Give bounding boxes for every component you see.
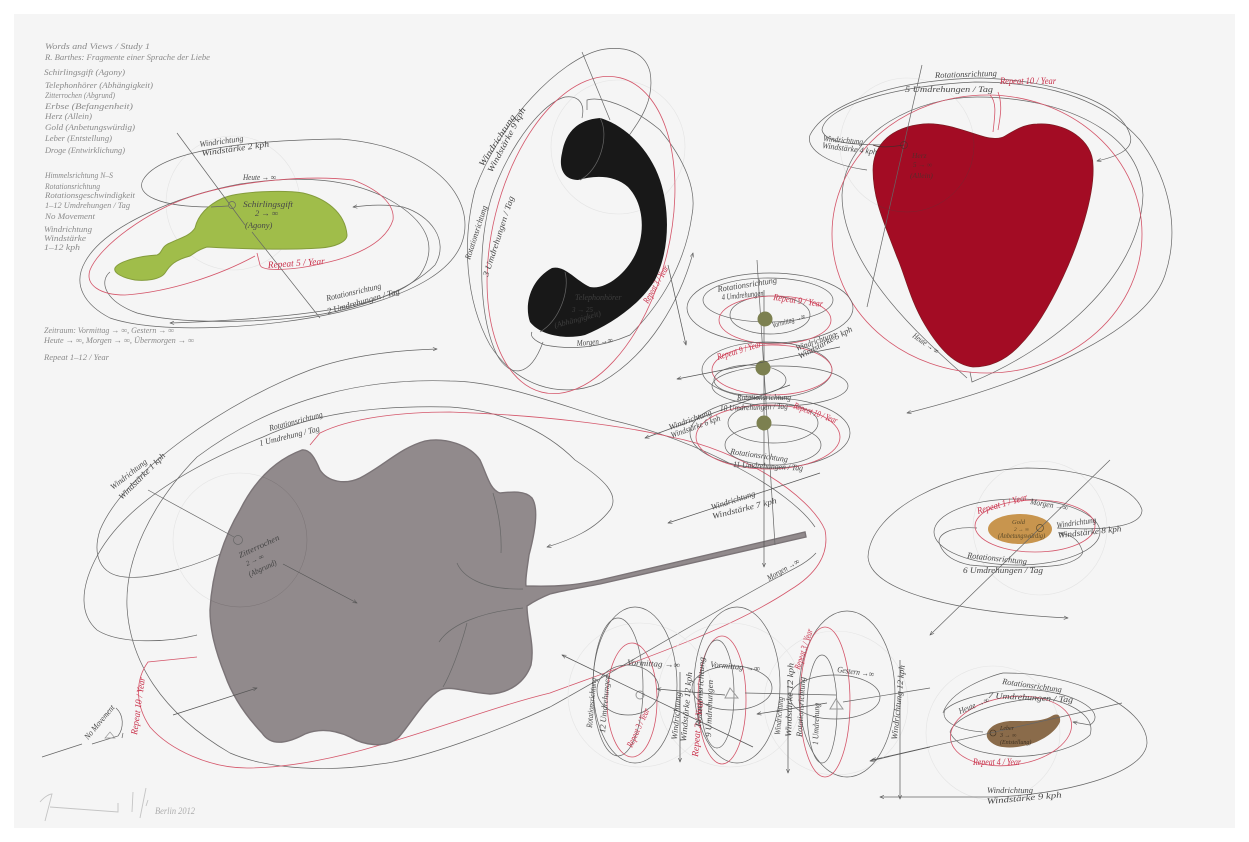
panel: three vertical discs: Vormittag →∞: [710, 659, 761, 673]
panel: brown liver shape with orbits: Rotationsrichtung: [1001, 676, 1063, 694]
panel: three vertical discs: Gestern →∞: [837, 664, 875, 679]
panel: green hemlock shape with orbits: 2 → ∞: [255, 208, 278, 218]
panel: brown liver shape with orbits: Leber: [999, 726, 1015, 732]
panel: three olive peas with orbits: Repeat 9 / Year: [715, 340, 763, 363]
text block: title and legend: Heute → ∞, Morgen → ∞, Übermorgen → ∞: [43, 335, 194, 345]
panel: three vertical discs: 1 Umdrehung: [810, 703, 821, 745]
panel: three olive peas with orbits: Rotationsrichtung: [736, 392, 791, 402]
panel: brown liver shape with orbits: Heute →∞: [956, 695, 990, 716]
panel: three vertical discs: Repeat 3 / Year: [793, 628, 816, 672]
icon: telephone receiver: [528, 118, 667, 337]
panel: grey electric ray shape: Rotationsrichtung: [267, 409, 324, 433]
panel: three olive peas with orbits: Windstärke 7 kph: [711, 495, 778, 521]
panel: grey electric ray shape: Windstärke 1 kph: [116, 451, 167, 501]
panel: no movement note: [81, 676, 148, 744]
panel: three olive peas with orbits: Rotationsrichtung: [729, 446, 789, 464]
text block: title and legend: Herz (Allein): [44, 111, 92, 121]
text block: title and legend: R. Barthes: Fragmente einer Sprache der Liebe: [44, 52, 210, 62]
text block: title and legend: Himmelsrichtung N–S: [44, 170, 114, 180]
text block: title and legend: Repeat 1–12 / Year: [43, 352, 110, 362]
icon: triangle marker middle: [725, 688, 738, 698]
panel: green hemlock shape with orbits: Heute → ∞: [242, 172, 276, 182]
panel: orange gold shape with orbits: Gold: [1012, 519, 1026, 526]
panel: red heart with orbits: 5 Umdrehungen / Tag: [905, 84, 993, 94]
panel: green hemlock shape with orbits: Rotationsrichtung: [324, 281, 382, 303]
icon: triangle marker right: [830, 699, 843, 709]
icon: gold shape: [988, 514, 1052, 544]
panel: orange gold shape with orbits: Morgen →∞: [1029, 496, 1069, 513]
panel: red heart with orbits: (Allein): [910, 171, 933, 180]
icon: gold circle marker: [636, 691, 644, 699]
panel: no movement note: Repeat 10 / Year: [130, 676, 148, 736]
icon: ray: [210, 440, 806, 745]
panel: orange gold shape with orbits: 2 → ∞: [1014, 527, 1029, 533]
panel: three olive peas with orbits: Repeat 10 / Year: [791, 401, 839, 427]
panel: green hemlock shape with orbits: [80, 133, 465, 328]
panel: brown liver shape with orbits: (Entstellung): [1000, 739, 1031, 746]
panel: black telephone receiver with orbits: [456, 48, 706, 413]
signature: [40, 788, 195, 821]
panel: green hemlock shape with orbits: Windrichtung: [199, 133, 244, 149]
signature: Berlin 2012: [155, 806, 195, 816]
panel: three olive peas with orbits: Windrichtung: [667, 407, 713, 432]
panel: three vertical discs: Repeat 2 / Year: [691, 698, 706, 758]
panel: three olive peas with orbits: Rotationsrichtung: [716, 275, 778, 294]
text block: title and legend: Windstärke: [44, 233, 86, 243]
panel: three olive peas with orbits: Repeat 9 / Year: [772, 293, 824, 310]
panel: brown liver shape with orbits: Repeat 4 / Year: [972, 758, 1021, 768]
panel: three olive peas with orbits: Windstärke 6 kph: [669, 413, 722, 440]
panel: three vertical discs: Windstärke 12 kph: [678, 672, 694, 742]
panel: black telephone receiver with orbits: 3 → 25: [571, 306, 594, 314]
panel: grey electric ray shape: (Abgrund): [247, 558, 278, 579]
panel: orange gold shape with orbits: Windstärke 8 kph: [1057, 523, 1122, 540]
panel: orange gold shape with orbits: Repeat 1 / Year: [975, 493, 1029, 517]
panel: brown liver shape with orbits: 7 Umdrehungen / Tag: [988, 690, 1073, 704]
panel: red heart with orbits: Rotationsrichtung: [934, 68, 997, 80]
panel: three vertical discs: Repeat 3 / Year: [625, 707, 653, 750]
panel: three vertical discs: Vormittag →∞: [627, 657, 680, 670]
panel: brown liver shape with orbits: Windrichtung: [987, 785, 1033, 795]
text block: title and legend: Leber (Entstellung): [44, 133, 112, 143]
panel: red heart with orbits: Heute → ∞: [910, 330, 941, 356]
text block: title and legend: Telephonhörer (Abhängigkeit): [45, 80, 153, 90]
panel: grey electric ray shape: Zitterrochen: [237, 533, 281, 560]
panel: black telephone receiver with orbits: Morgen →∞: [575, 335, 613, 348]
panel: three olive peas with orbits: [645, 260, 854, 583]
panel: red heart with orbits: Windrichtung: [823, 133, 864, 146]
icon: liver shape: [987, 714, 1060, 747]
panel: three vertical discs: Windrichtung: [772, 696, 785, 735]
panel: grey electric ray shape: Windrichtung: [108, 457, 149, 492]
text block: title and legend: Rotationsrichtung: [44, 181, 100, 191]
panel: green hemlock shape with orbits: 2 Umdrehungen / Tag: [326, 286, 401, 316]
icon: olive pea bottom: [756, 416, 772, 430]
panel: brown liver shape with orbits: Windstärke 9 kph: [986, 789, 1062, 806]
panel: orange gold shape with orbits: [868, 460, 1142, 635]
panel: three olive peas with orbits: 4 Umdrehungen: [721, 288, 764, 302]
panel: grey electric ray shape: 1 Umdrehung / Tag: [258, 423, 321, 448]
panel: black telephone receiver with orbits: (Abhängigkeit): [553, 309, 602, 330]
text block: title and legend: Zitterrochen (Abgrund): [45, 90, 115, 100]
text block: title and legend: Erbse (Befangenheit): [44, 101, 133, 111]
panel: black telephone receiver with orbits: 3 Umdrehungen / Tag: [480, 195, 516, 279]
panel: three vertical discs: Windrichtung 12 kph: [889, 665, 907, 740]
panel: three olive peas with orbits: 11 Umdrehungen / Tag: [733, 459, 803, 473]
text block: title and legend: Rotationsgeschwindigkeit: [44, 190, 136, 200]
panel: three vertical discs: 12 Umdrehungen: [597, 675, 612, 733]
panel: red heart with orbits: Herz: [911, 151, 927, 160]
panel: green hemlock shape with orbits: Windstärke 2 kph: [201, 139, 270, 158]
panel: orange gold shape with orbits: Rotationsrichtung: [966, 550, 1028, 566]
panel: black telephone receiver with orbits: Windstärke 9 kph: [485, 106, 528, 174]
icon: green shape: [115, 191, 347, 280]
text block: title and legend: Gold (Anbetungswürdig): [45, 122, 135, 132]
panel: black telephone receiver with orbits: Repeat 3 / Year: [642, 264, 672, 306]
panel: brown liver shape with orbits: 3 → ∞: [999, 733, 1017, 739]
text block: title and legend: 1–12 Umdrehungen / Tag: [45, 200, 130, 210]
panel: three olive peas with orbits: Vormittag →∞: [771, 311, 806, 330]
panel: three vertical discs: Windstärke 12 kph: [783, 663, 796, 737]
panel: brown liver shape with orbits: [872, 666, 1147, 806]
panel: black telephone receiver with orbits: Telephonhörer: [575, 293, 622, 302]
panel: grey electric ray shape: 2 → ∞: [244, 553, 265, 568]
panel: three olive peas with orbits: Morgen →∞: [764, 556, 801, 583]
text block: title and legend: No Movement: [44, 211, 96, 221]
panel: three vertical discs: 9 Umdrehungen: [703, 680, 715, 737]
panel: large orbits around ray: [84, 349, 826, 769]
panel: red heart with orbits: Repeat 10 / Year: [999, 77, 1056, 87]
panel: red heart with orbits: 5 → ∞: [913, 161, 932, 169]
text block: title and legend: Droge (Entwirklichung): [44, 145, 125, 155]
panel: green hemlock shape with orbits: Schirlingsgift: [243, 199, 294, 209]
panel: red heart with orbits: [809, 65, 1172, 413]
icon: olive pea top: [758, 312, 772, 326]
text block: title and legend: Zeitraum: Vormittag → ∞, Gestern → ∞: [44, 325, 174, 335]
panel: red heart with orbits: Windstärke 4 kph: [822, 140, 878, 157]
panel: three vertical discs: Rotationsrichtung: [693, 657, 707, 728]
panel: orange gold shape with orbits: Windrichtung: [1056, 515, 1097, 530]
icon: olive pea middle: [756, 360, 770, 376]
panel: green hemlock shape with orbits: (Agony): [245, 220, 273, 230]
text block: title and legend: Schirlingsgift (Agony): [44, 67, 125, 77]
panel: orange gold shape with orbits: 6 Umdrehungen / Tag: [963, 565, 1043, 575]
panel: three vertical discs: Rotationsrichtung: [794, 677, 807, 738]
icon: heart: [873, 124, 1093, 367]
panel: black telephone receiver with orbits: Rotationsrichtung: [462, 204, 489, 261]
panel: three vertical discs: Windrichtung: [669, 691, 683, 740]
panel: three olive peas with orbits: Windstärke 5 kph: [796, 324, 854, 361]
panel: orange gold shape with orbits: (Anbetungswürdig): [998, 532, 1046, 540]
text block: title and legend: Windrichtung: [44, 224, 92, 234]
text block: title and legend: 1–12 kph: [44, 242, 80, 252]
panel: three olive peas with orbits: Windrichtung: [710, 488, 756, 512]
text block: title and legend: [43, 41, 210, 362]
panel: green hemlock shape with orbits: Repeat 5 / Year: [267, 257, 325, 271]
panel: no movement note: No Movement: [81, 702, 117, 742]
panel: three olive peas with orbits: Windrichtung: [794, 329, 837, 353]
panel: three olive peas with orbits: 10 Umdrehungen / Tag: [720, 401, 788, 413]
panel: grey electric ray shape: [42, 409, 806, 757]
panel: three vertical discs: [562, 607, 930, 799]
panel: black telephone receiver with orbits: Windrichtung: [476, 112, 517, 168]
text block: title and legend: Words and Views / Study 1: [45, 41, 150, 51]
panel: three vertical discs: Rotationsrichtung: [584, 677, 598, 729]
